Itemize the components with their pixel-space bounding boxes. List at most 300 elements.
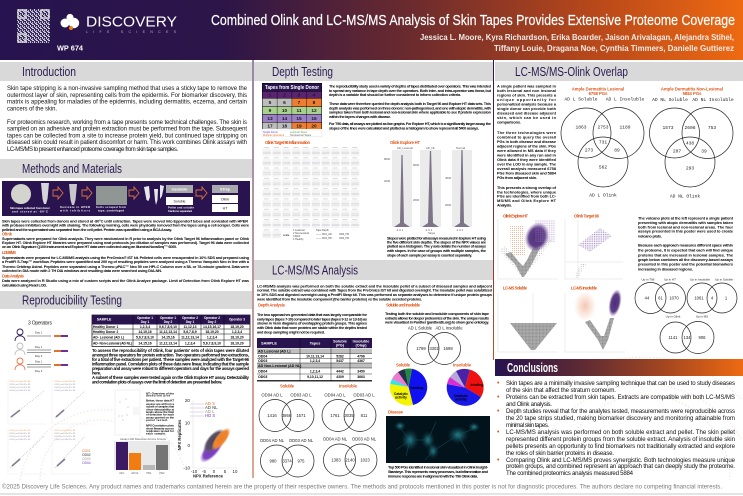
text: detectability note: of detection for each [146,413,174,417]
text: overlap description: combined to query the overall [497,134,556,139]
text: histogram caption: the five different skin depths. The slopes of the NPX values are [387,239,487,244]
bullets: • [497,457,500,464]
text: volcano description: presenting with atopic dermatitis with samples taken [638,220,734,225]
label: Depth Analysis [258,302,286,308]
plot 4 [52,428,90,474]
tape disc [11,184,31,204]
text: disease caption: immune response are in alignment with the T96 Olink data. [388,473,478,478]
text: overlap description: PGs from adjacent skin. [497,175,537,180]
table: tapes and protein groups: Soluble [333,340,347,344]
text: conclusions: Depth studies reveal that for the analytes tested, measurements were reproducible across [506,408,735,415]
label: Olink Explore HT [390,140,420,145]
table: tapes and protein groups: AD Non-Lesional (AD NL) [258,364,302,368]
arrow: operator 2 days: Day 2 [35,354,43,358]
text: volcano description: assays presented in this poster were used to create [638,229,734,234]
text: conclusions: pellets presents an opportunity to find biomarkers not traditionally extracted and explore [506,443,736,450]
scatter legend: AD NL [205,405,218,410]
arrow: operator 2 days [27,345,68,358]
text: depth testing: to spread any variance in tape depth over the operators. Both inter- and intra-operator was linear, but [329,88,492,93]
plot legend: OD04 [82,461,91,465]
text: overlap description: Olink data if they were identified [497,157,557,162]
text: Testing both the soluble and insoluble components of skin tape [385,311,490,316]
table: operators: Day 1 [141,320,149,324]
table: tapes and protein groups: (Olap) [356,344,367,348]
venn: AD L soluble vs insoluble: AD L Soluble [408,326,433,330]
text: overlap description: unique opportunity for [497,97,556,102]
text: detectability note: NPX Correlation plots [146,424,174,428]
bullets: • [497,429,500,436]
scatter: NPX replicates: NPX Reference [193,474,224,478]
text: overlap description: overall analysis measured 6758 [497,166,557,171]
text: and deep sampling might not be required. [257,329,325,334]
text: shown in Venn diagrams of overlapping protein groups. This agrees [257,321,367,326]
scatter: NPX replicates: NPX Replicates [177,419,182,450]
text: reproducibility: here. [92,370,101,375]
text: methods: Supernatants were prepared for Olink analysis. They were randomized in R prior to analysis by the Olink Target 96 Inflammation panel or Olink [2,236,250,241]
table: operators: Healthy Donor 2 [93,330,118,334]
label: soluble pie: Soluble [396,362,411,368]
line plot legend: 3 Both [293,235,301,238]
text: disease caption: Top 500 PGs identified in lesional skin visualized in Olink Insight- [388,464,489,470]
bar chart: detectability: AD NL [131,472,139,475]
plot stats: OD04 y=0.98x R²=.99 [54,438,76,441]
text: LC-MS/MS intro: LC-MS/MS analysis was performed on both the soluble extract and the insoluble pellet of a subset of diseased samples and adjacent [257,283,493,288]
text: histogram caption: with slopes. In the case of groups with multiple samples, the [386,248,487,253]
bar chart: detectability: HD1 [146,472,152,475]
text: disease caption: Stawkeye. This represents many processes, but inflammation and [388,469,489,474]
icon: operator 1 [15,329,25,341]
table: tapes from single donor: 2 [283,92,286,98]
text: overlap description: PGs in both disease and disease [497,139,557,144]
venn: insoluble OD04 AD NL: 1383 [331,458,341,462]
table: tapes and protein groups: 1,2,3,4 [310,359,320,363]
plot 2 [52,380,90,424]
captions: Cells scraped from [96,205,126,209]
axis labels: -1 0 1 [456,228,464,232]
plot stats [9,380,76,441]
pie: soluble: activity [395,396,407,400]
table: operators: Operator 2 [204,316,220,320]
text: depth testing: depth analysis was performed on three donors: non-pathogenised, and one with atopic dermatitis, with [329,105,492,110]
axis labels: -1 0 1 [396,228,404,232]
text: overlap description: skin, which can be used in [497,115,557,120]
text: reproducibility: Inflammation panel. Correlation plots of these data were linear, indicating that the sample [92,361,250,366]
venn: up in insoluble vs soluble: 1061 [694,296,704,300]
text: histogram caption: plotted as a histogram. The y axis details the number of assays [387,244,486,249]
volcano: Olink Explore HT [498,214,558,279]
table: operators: 11,12,13 [183,325,197,329]
table: operators: 11,12,13,14 [159,330,177,334]
table: tapes from single donor: 18 [282,124,287,130]
label: Soluble and Insoluble [386,302,421,308]
panel: conclusions [495,359,743,477]
venn: AD L soluble vs insoluble: 3302 [429,346,439,351]
text: reproducibility: To assess the reproducibility of Olink, four patients' sets of skin tapes were diluted [92,348,249,353]
text: detectability note: subset of samples that [146,405,174,409]
text: detectability note: detection plot [146,394,170,398]
venn: up in Olink vs MS: 134 [684,335,691,340]
text: overlap description: over the LOD in any sample. The [497,161,557,166]
table: operators: AD- Lesional (AD L) [93,336,124,340]
table: operators: 11,12,13,14 [181,336,199,340]
plot stats: OD01 y=1.00x R²=.99 [9,380,31,383]
venn: AD lesional overlap: 1863 [575,124,587,130]
table: operators: Operator 1 [160,316,176,320]
table legend: Single Donor [263,130,278,134]
table: operators: Healthy Donor 1 [93,325,118,329]
table: operators: 1,2,3,4 [207,336,217,340]
fractions: Insoluble [172,188,187,192]
venn: up in Olink vs MS: 1141 [668,335,678,340]
text: depth testing: samples taken from both lesional and non-lesional skin where applicable to see if protein expression [329,110,492,115]
fractions [166,185,193,205]
volcano: Olink Target 96: Olink Target 96 [574,214,600,218]
plot stats: OD03 y=1.01x R²=.98 [54,435,76,438]
venn: soluble OD04 AD L: OD04 AD L [261,392,283,398]
venn: soluble OD04 AD L: 1571 [296,413,306,418]
plot legend: OD02 [82,453,91,457]
venn: AD L soluble vs insoluble: 1698 [443,346,453,351]
grid of line plots [262,147,360,230]
text: introduction: outermost layer of skin, representing cells from the epidermis. For biomarker discovery, this [7,93,247,99]
text: overlap description: MS/MS and Olink Explore HT [497,198,557,203]
text: conclusions: minimal skin tapes. [506,422,549,429]
venn: soluble OD04 AD NL: 3374 [282,458,292,464]
venn: up in T96 vs HT: 1070 [669,296,679,300]
venn: AD L soluble vs insoluble [407,326,463,364]
table: operators [92,315,250,346]
venn: AD non-lesional overlap: 207 [673,148,681,154]
operators diagram: 3 Operators [28,320,52,326]
text: overlap description: The three technologies were [497,130,557,135]
venn: up in T96 vs HT: Up in T96 [642,278,655,282]
table: operators: 1,2,3,4 [140,325,150,329]
text: were visualized in Panther (pantherdb.org) to show gene ontology. [384,320,489,325]
text: introduction: LC-MS/MS to present enhanced proteome coverage from skin tape samples. [7,147,178,153]
line plot legend: 1 Lesional [293,229,305,232]
table: operators: AD- Non-Lesional (AD NL) [93,342,132,346]
pie: soluble [390,368,427,406]
bar chart: detectability [114,437,170,475]
captions: tape, centrifuged [98,208,124,212]
venn: soluble OD04 AD NL: OD03 AD NL [289,438,314,443]
venn: soluble OD04 AD L: 3866 [282,413,292,418]
text: depth testing: The reproducibility study used a variety of depths of tapes distributed over operators. This was intended [329,84,492,88]
venn: insoluble OD04 AD L: OD03 AD L [353,392,375,398]
arrow: operator 3 days: Day 1 [35,360,43,364]
plot legend: OD01 [82,449,91,453]
table: tapes from single donor: 19 [296,124,302,130]
watermark background [20,357,742,480]
table: tapes and protein groups: OD03 [258,359,267,363]
text: disease caption [388,464,489,478]
text: conclusions: protein groups, and combined represent an approach that can deeply study the proteome. [506,463,735,470]
plot stats: OD03 y=1.01x R²=.98 [9,435,31,438]
text: methods: on an Olink Signature Q100 instrument and Explore HT data were collected using an Illumina NovaSeq™ 6000. [2,244,177,249]
plot 3 [8,428,46,474]
venn: up in T96 vs HT: Up in HT [664,278,676,282]
venn: insoluble OD04 AD NL [323,436,377,476]
axis labels: -1 0 1 [425,228,433,232]
scatter: NPX replicates: 0 [213,469,216,474]
venn: AD lesional overlap: 731 [599,140,607,146]
text: overlap description: personalized analysis because a [497,102,557,106]
text: volcano description: the proteome, it is expected that each will find unique [638,248,734,253]
panel: LC-MS/MS-Olink overlap [495,62,743,354]
photo [96,186,127,205]
table: operators: 5,6,7,8,9,10 [159,325,177,329]
text [256,312,368,334]
text: LC-MS/MS intro: in 10% SDS and digested overnight using a ProtiFi Strap kit. This was performed as separate analyses to determine if unique protein groups [257,292,492,297]
text: methods: Supernatants were prepared for LC-MS/MS analysis using the PreOmics® iST kit. Pelleted cells were resuspended in 10% SDS and prepared using [2,255,250,260]
text: introduction: tapes can be collected from a site to increase protein yield, but continued tape stripping on [7,133,247,139]
plot stats: OD02 y=0.99x R²=.99 [9,432,31,435]
venn: AD lesional overlap: AD L Insoluble [606,96,645,102]
pie: soluble: Catalytic [394,392,408,396]
table: tapes and protein groups: 4367 [357,359,365,363]
plot legend: OD03 [82,457,91,461]
text: volcano description: The volcano plots at the left represent a single patient [638,215,734,220]
table: tapes from single donor: 4 [313,92,316,98]
venn: insoluble OD04 AD NL: OD03 AD NL [352,436,377,442]
footer disclaimer: ©2025 Discovery Life Sciences. Any product names and trademarks contained herein are the property of their respective owners. The methods and protocols mentioned in this poster is not for diagnostic procedures. The authors declare no competing financial interests. [2,483,722,490]
panel: introduction [0,62,252,153]
text: The two approaches generated data that was largely comparable for [257,312,367,317]
table: operators: Day 2 [208,320,216,324]
table: tapes and protein groups: 1,2,3,4 [310,370,320,374]
table: tapes and protein groups: OD04 [258,370,267,374]
arrow [129,187,139,199]
venn: soluble OD04 AD L [259,392,314,432]
captions: and stored at -80°C [12,210,48,214]
text: with Olink data that more proteins are stable within the depths tested [256,325,368,330]
pie: soluble: binding [411,386,423,390]
axis labels: 2000 [445,203,452,207]
table: tapes and protein groups: 10,11,13,14 [306,354,324,358]
assays: Olink [221,198,229,202]
table: tapes and protein groups [257,338,372,381]
tube [41,183,49,204]
text: overlap description: adjacent regions of the skin. PGs [497,143,556,148]
text: overlap description: the technologies, where unique [497,189,557,194]
table: operators: SAMPLE [97,318,112,322]
scatter: NPX replicates: -10 [191,469,198,474]
text: volcano description: presented in this poster and the potential biomarkers [638,262,733,267]
heading: methods: Methods and Materials [22,162,122,176]
volcano: Olink Explore HT: Olink Explore HT [503,214,528,218]
text: overlap description: PGs from diseased skin and 5884 [497,170,557,175]
text: methods: Data Analysis [2,274,25,278]
table: operators: 1,2,3,4 [185,342,195,346]
assays: HT [223,206,228,210]
table: tapes from single donor: 9 [269,108,272,114]
scatter legend: AD S [205,401,215,406]
table: operators: 14,15,16,17 [203,325,221,329]
text: methods: collected in DIA mode with 2 TH DIA windows and resulting data were searched using DIA-NN. [2,268,162,273]
text: conclusions [506,380,736,477]
table: tapes and protein groups: 4442 [336,370,344,374]
venn: soluble OD04 AD NL: 975 [298,458,305,464]
volcano: Olink Target 96 [565,214,623,279]
text: introduction: For proteomics research, working from a tape presents some technical challenges. The skin is [7,120,247,126]
table: tapes from single donor: 13 [267,116,273,122]
table: tapes from single donor: 8 [313,100,316,106]
venn: AD non-lesional overlap [650,86,734,200]
text: detectability note [146,391,175,436]
table: tapes from single donor: 16 [311,116,317,122]
line plot legend [283,229,349,241]
pie: insoluble: binding [471,383,483,387]
table: operators: 5,6,7,8,9,10 [136,336,154,340]
text: introduction: matrix is appealing for maladies of the epidermis, including dermatitis, eczema, and certain [7,100,247,106]
text: detectability note: assays are all from a [146,402,174,406]
text: methods [1,218,250,288]
table: tapes and protein groups: OD04 [258,354,267,358]
table: operators: Operator 3 [229,318,245,322]
text: depth testing: within the layers changes with disease. [328,114,391,119]
tubes [144,185,164,205]
text: detectability note: assay queried on the [146,415,174,419]
table: tapes and protein groups: Insoluble [353,340,369,344]
table legend: Nonlesional Tapes [290,133,312,137]
text: methods: pelleted and the supernatant was separated from the cell pellet. Protein was quantified using a BCA Assay. [2,227,172,232]
table: tapes from single donor: 11 [296,108,302,114]
scatter legend: HD S [205,413,215,418]
captions: Sonicate in HPER [60,205,90,209]
text: conclusions: LC-MS/MS analysis was performed on both soluble extract and pellet. The skin pellet [506,429,735,436]
scatter legend [190,401,218,418]
header banner [0,0,743,60]
arrow: operator 3 days: Day 2 [35,369,43,373]
fractions: Soluble [174,200,186,204]
venn: up in insoluble vs soluble: 1 [725,296,728,300]
bar chart: detectability: HD2 [159,472,165,475]
line plot legend: scale [283,234,290,237]
plot stats: OD04 y=0.98x R²=.99 [9,438,31,441]
venn: up in insoluble vs soluble: Up in Insoluble [690,278,710,282]
table: tapes from single donor: Tapes from Single Donor [265,85,319,91]
text: volcano description [638,215,734,272]
text: depth testing: slopes of the lines were calculated and plotted as a histogram to show represent all 5400 assays. [329,125,479,130]
icon: operator 3 [15,358,25,370]
table: tapes and protein groups: 4309 [336,375,344,379]
line plot legend: Tape Depth [316,229,329,232]
text: volcano description: graph below combines all the discovery-based assays [638,257,733,262]
venn: up in T96 vs HT: 44 [645,296,650,300]
plot stats: OD04 y=0.98x R²=.99 [54,389,76,392]
volcano: LC-MS insoluble [565,286,625,352]
venn: soluble OD04 AD NL: OD04 AD NL [260,438,285,443]
table legend: Multiple Operators [263,133,285,137]
text: conclusions: and Olink analysis. [506,401,552,408]
venn: AD L soluble vs insoluble: 1799 [416,346,426,351]
bullets: • [497,394,500,401]
table: tapes and protein groups: 5282 [336,354,344,358]
table: tapes from single donor: 17 [267,124,273,130]
table: operators: Day 2 [164,320,172,324]
text [384,311,490,325]
text: volcano description: volcano plots. [638,234,662,239]
panel: LC-MS/MS analysis [254,260,493,478]
table: tapes and protein groups: AD Lesional (AD L) [258,350,291,354]
text: detectability note: Below, these data HT [146,399,174,403]
text: detectability note: each sample. [146,432,166,436]
last plots row [262,230,282,240]
line plot legend: 4 Healthy [293,238,304,241]
text: LC-MS/MS intro: normal. The soluble extract was combined with Tapes from the PreOmics iST kit and digested overnight. The insoluble pellet was solubilized [257,288,493,293]
venn: up in insoluble vs soluble: Up in Soluble [715,278,733,282]
arrow [196,187,207,199]
text: histogram caption: slope of each sample per assay is counted separately. [387,252,472,257]
table: operators: 14,15,16 [138,330,152,334]
logo wordmark: DISCOVERY [86,14,177,30]
scatter: NPX replicates: -10 [183,466,190,470]
bar chart: detectability: AD L [119,472,125,475]
scatter: NPX replicates: 10 [233,469,238,474]
table: tapes and protein groups: 9,10,11,12 [307,375,323,379]
bar chart: detectability: Assay LOD Detection Across Groups [120,437,167,441]
text: detectability note: show detectability at [146,407,174,411]
captions: Pellet and soluble [168,206,194,210]
text: depth testing: These data were therefore queried the depth analysis both in Target 96 and Explore HT data sets. This [329,101,491,106]
venn: up in Olink vs MS: Up in MS [696,314,708,318]
PCA plot [115,390,140,435]
text: depth testing [328,84,492,130]
venn: insoluble OD04 AD L: 1761 [330,413,340,418]
table legend: Lesional Tapes [290,130,308,134]
pie: insoluble: Catalytic [454,394,468,398]
venn: up in Olink vs MS [660,314,714,354]
scatter: NPX replicates: 10 [185,420,190,426]
table: tapes and protein groups: 3663 [357,375,365,379]
table: operators: 5,6,7,8,9 [183,330,197,334]
venn: up in Olink vs MS: Up in Olink [666,314,681,318]
volcano: LC-MS soluble: LC-MS Soluble [503,286,528,290]
axis labels: AD_Lesional [397,146,413,150]
captions: with inhibitors [59,208,90,212]
chart: olink target 96 small multiples [262,140,360,241]
venn: soluble OD04 AD NL [260,438,314,477]
text: introduction: Skin tape stripping is a non-invasive sampling method that uses a sticky tape to remove the [7,86,248,92]
venn: AD non-lesional overlap: 39 [701,148,707,154]
text: overlap description: regions of skin. This presents a [497,92,557,98]
scatter legend: AD L [205,409,215,414]
venn: soluble OD04 AD NL: 980 [270,458,277,464]
table: tapes and protein groups: SAMPLE [261,342,277,346]
venn: AD non-lesional overlap: 5884 PGs [683,91,702,96]
venn: insoluble OD04 AD L: 3035 [344,413,354,418]
plot stats: OD03 y=1.01x R²=.98 [54,386,76,389]
table: tapes and protein groups: Tapes [310,342,320,346]
text: overlap description: diseased and disease adjacent [497,110,557,116]
table: tapes and protein groups: 4796 [357,354,365,358]
text: conclusions: The combined proteomics analysis measured 5884 [506,470,634,477]
table: operators: 18,19,20 [230,325,244,329]
label: insoluble pie: Insoluble [453,362,472,368]
text: methods: Olink [2,232,13,236]
axis labels: 8000 [384,157,391,161]
scatter: NPX replicates: -5 [202,469,207,474]
arrow: operator 1 day 1: Day 1 [35,330,43,334]
label: disease: Disease [388,410,404,414]
text: methods: a ProtiFi S-Trap™ workflow. Peptides were quantified and 200 ng of resulting peptides were analyzed using a Thermo Vanquish Neo in line with a [2,259,250,264]
scatter: NPX replicates: 5 [224,469,227,474]
venn: AD lesional overlap: 2753 [597,124,609,130]
bullets: • [497,380,500,387]
text: volcano description: both from lesional and non-lesional areas. The four [638,224,733,229]
arrow [53,187,63,199]
chart: olink explore HT histograms [384,140,487,257]
